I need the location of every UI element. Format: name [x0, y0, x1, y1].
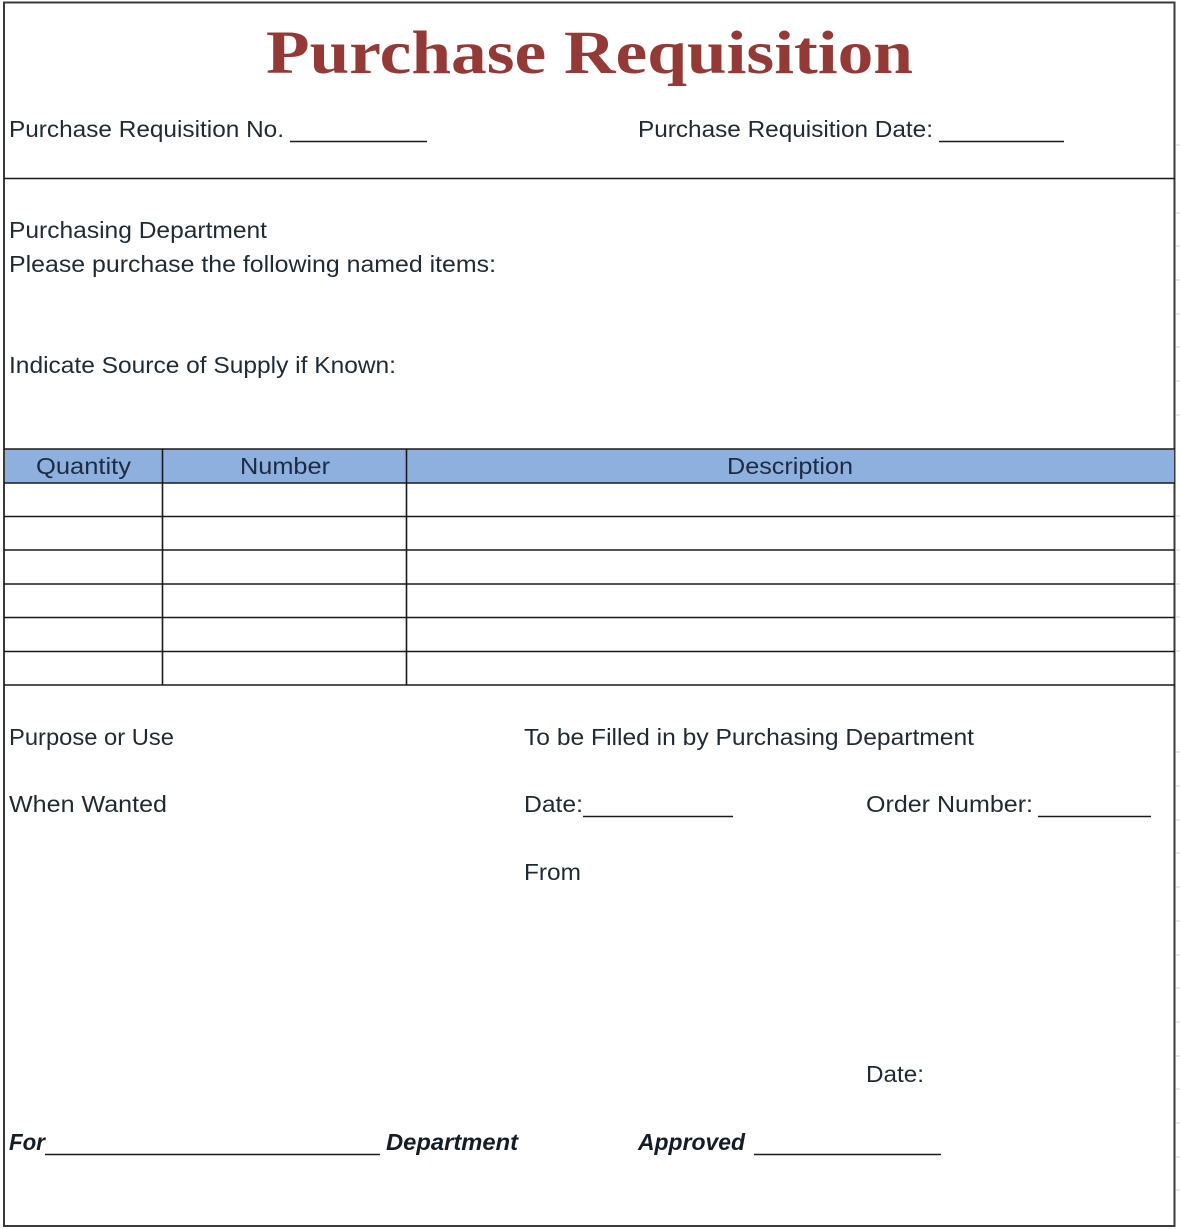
purpose or use label: Purpose or Use — [9, 724, 174, 750]
table header row: Number — [240, 453, 330, 479]
from label: From — [524, 859, 581, 885]
department signature field: For — [9, 1129, 46, 1155]
title: Purchase Requisition — [266, 20, 913, 87]
table header row: Quantity — [36, 453, 132, 479]
requisition date field: Purchase Requisition Date: — [638, 116, 933, 142]
department signature field: Department — [386, 1129, 519, 1155]
table header row — [5, 449, 1174, 483]
table header row: Description — [727, 453, 853, 479]
department signature field — [9, 1129, 519, 1155]
request instructions: Please purchase the following named items: — [9, 251, 496, 277]
items table — [4, 449, 1175, 685]
requisition number field: Purchase Requisition No. — [9, 116, 284, 142]
approved signature field: Approved — [637, 1129, 746, 1155]
request instructions: Purchasing Department — [9, 217, 268, 243]
purchasing department section heading: To be Filled in by Purchasing Department — [524, 724, 975, 750]
approval date label: Date: — [866, 1061, 924, 1087]
when wanted label: When Wanted — [9, 791, 167, 817]
order number field: Order Number: — [866, 791, 1033, 817]
date field: Date: — [524, 791, 583, 817]
request instructions — [9, 217, 496, 277]
source of supply label: Indicate Source of Supply if Known: — [9, 352, 396, 378]
